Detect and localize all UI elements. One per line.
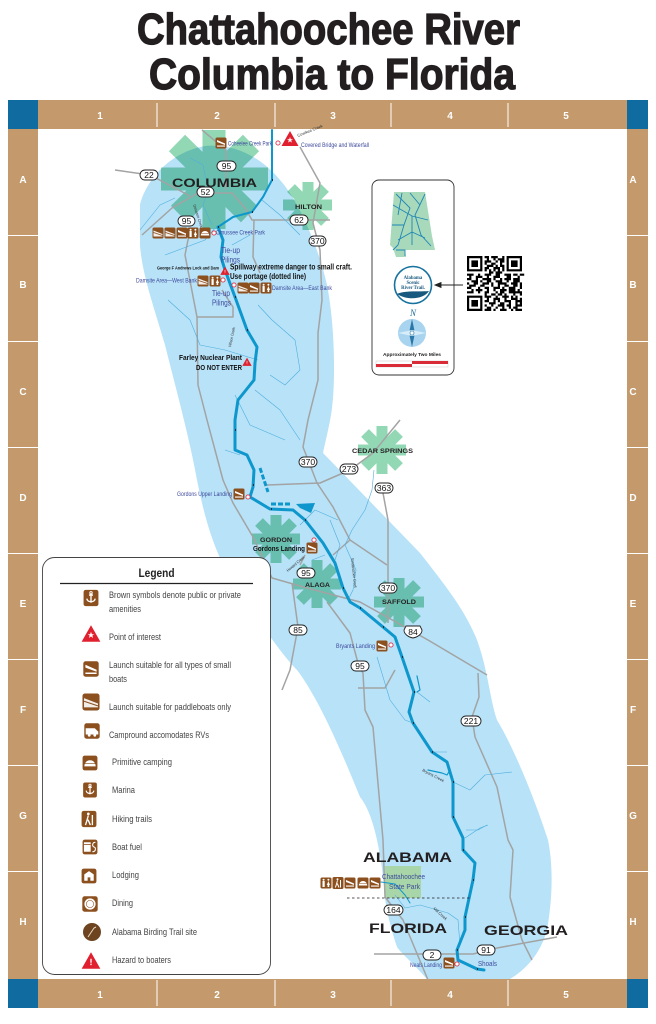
map frame: 1 — [97, 990, 103, 1001]
warning labels — [157, 262, 352, 553]
warning labels: DO NOT ENTER — [196, 363, 242, 372]
site labels: Chattahoochee — [382, 872, 425, 881]
map frame: C — [19, 387, 27, 398]
legend text: boats — [109, 674, 127, 684]
creek labels: Howard Creek — [285, 555, 305, 573]
map frame: 5 — [563, 990, 569, 1001]
map frame: 5 — [563, 111, 569, 122]
site labels: Omussee Creek Park — [216, 230, 266, 236]
legend text: Lodging — [112, 870, 139, 880]
inset panel — [372, 180, 454, 375]
site markers — [212, 141, 478, 969]
map frame: G — [629, 811, 637, 822]
title: Chattahoochee River — [137, 5, 520, 54]
state boundary — [347, 897, 470, 899]
legend text: Primitive camping — [112, 757, 172, 767]
river — [218, 130, 484, 970]
map frame: F — [630, 705, 636, 716]
highway shields: 370 — [381, 583, 395, 593]
city marker: Saffold — [374, 578, 424, 627]
site labels: Tie-up — [221, 246, 240, 255]
Alabama Scenic River Trail logo: River Trail. — [401, 286, 425, 291]
city marker: Hilton — [283, 182, 332, 230]
site labels: Covered Bridge and Waterfall — [301, 143, 369, 149]
creek labels: Sandandchee Creek — [350, 558, 358, 588]
legend text — [109, 590, 241, 965]
city and state labels: FLORIDA — [369, 920, 447, 936]
title — [137, 5, 520, 99]
legend text: Dining — [112, 898, 133, 908]
site labels: Bryants Landing — [336, 644, 375, 650]
highway shields: 95 — [301, 568, 311, 578]
highway shields: 95 — [355, 661, 365, 671]
highway shields: 164 — [386, 905, 401, 915]
legend text: Campround accomodates RVs — [109, 730, 209, 740]
highway shields: 84 — [408, 627, 418, 637]
map frame: 3 — [330, 990, 336, 1001]
creek labels: Bryans Creek — [422, 767, 445, 783]
Alabama Scenic River Trail logo: Scenic — [406, 281, 420, 286]
highway shields: 370 — [310, 236, 325, 246]
city and state labels: CEDAR SPRINGS — [352, 449, 413, 455]
city and state labels: ALAGA — [305, 583, 331, 589]
city marker: Cedar Springs — [358, 426, 406, 474]
legend text: Brown symbols denote public or private — [109, 590, 241, 600]
creek labels: Omussee Creek — [192, 204, 204, 228]
state park area — [385, 866, 421, 898]
legend text: Launch suitable for paddleboats only — [109, 702, 231, 712]
compass — [398, 308, 426, 347]
map frame: B — [629, 280, 637, 291]
site labels: Neals Landing — [410, 963, 442, 969]
city and state labels: ALABAMA — [363, 849, 452, 865]
creeks — [140, 158, 512, 945]
city marker: Gordon — [252, 515, 300, 563]
roads — [115, 130, 557, 980]
legend text: Marina — [112, 785, 135, 795]
highway shields: 273 — [342, 464, 356, 474]
highway shields: 22 — [144, 170, 154, 180]
warning labels: Spillway extreme danger to small craft. — [230, 262, 352, 272]
map frame: E — [20, 599, 27, 610]
highway shields: 85 — [293, 625, 303, 635]
site labels: Shoals — [478, 959, 497, 968]
warning labels: Use portage (dotted line) — [230, 272, 306, 281]
map frame: D — [629, 493, 637, 504]
scale bar — [376, 361, 448, 367]
highway shields: 370 — [301, 457, 315, 467]
city and state labels: SAFFOLD — [382, 600, 417, 606]
map frame: G — [19, 811, 27, 822]
title: Columbia to Florida — [149, 50, 515, 99]
creek labels: Cowikee Creek — [297, 123, 323, 138]
highway shields: 2 — [430, 950, 435, 960]
site labels: Damsite Area—West Bank — [136, 278, 198, 284]
legend panel — [42, 558, 270, 974]
legend text: Launch suitable for all types of small — [109, 660, 231, 670]
legend text: Boat fuel — [112, 842, 142, 852]
map frame: H — [629, 917, 637, 928]
map frame: E — [630, 599, 637, 610]
city marker: Columbia — [161, 130, 268, 229]
mini map of Alabama — [390, 192, 435, 257]
compass: N — [409, 308, 417, 318]
site labels: Pilings — [212, 298, 231, 308]
site labels: Damsite Area—East Bank — [272, 286, 333, 292]
highway shields: 62 — [294, 215, 304, 225]
city and state labels — [172, 176, 568, 938]
map frame: B — [19, 280, 27, 291]
creek labels: Wilson Creek — [227, 327, 236, 347]
arrow to logo — [435, 282, 463, 288]
highway shields: 91 — [481, 945, 491, 955]
city marker: Alaga — [293, 560, 341, 608]
map frame: F — [20, 705, 26, 716]
legend text: Hazard to boaters — [112, 955, 171, 965]
highway shields: 95 — [222, 161, 231, 171]
site labels: Gordons Upper Landing — [177, 492, 232, 498]
highway shields — [140, 161, 495, 960]
creek labels — [192, 123, 448, 921]
legend text: Alabama Birding Trail site — [112, 927, 197, 937]
Alabama Scenic River Trail logo: Alabama — [404, 276, 423, 281]
map frame: 1 — [97, 111, 103, 122]
map frame: A — [629, 175, 637, 186]
creek labels: Mill Creek — [432, 906, 448, 921]
city and state labels: GORDON — [260, 538, 292, 544]
city and state labels: GEORGIA — [484, 922, 568, 938]
site labels: State Park — [389, 882, 420, 891]
legend heading: Legend — [138, 566, 174, 580]
map frame: A — [19, 175, 27, 186]
legend text: Hiking trails — [112, 814, 152, 824]
Alabama Scenic River Trail logo — [394, 266, 432, 304]
map frame: C — [629, 387, 637, 398]
QR code — [467, 256, 524, 311]
highway shields: 221 — [464, 716, 478, 726]
city and state labels: HILTON — [295, 205, 322, 211]
map frame: H — [19, 917, 27, 928]
legend text: Point of interest — [109, 632, 161, 642]
site labels: Tie-up — [212, 289, 230, 298]
map frame: 4 — [447, 990, 453, 1001]
river corridor — [140, 146, 552, 979]
highway shields: 95 — [182, 216, 191, 226]
highway shields: 363 — [377, 483, 391, 493]
site labels: Coheelee Creek Park — [228, 142, 273, 148]
hazard and point of interest markers — [220, 131, 298, 366]
legend text: amenities — [109, 604, 141, 614]
site labels — [136, 142, 497, 969]
map frame: 2 — [214, 111, 220, 122]
warning labels: George F Andrews Lock and Dam — [157, 266, 219, 270]
map frame: 2 — [214, 990, 220, 1001]
amenity icons — [152, 138, 454, 968]
warning labels: Farley Nuclear Plant — [179, 353, 242, 362]
map frame: 3 — [330, 111, 336, 122]
highway shields: 52 — [201, 187, 210, 197]
map frame: D — [19, 493, 27, 504]
warning labels: Gordons Landing — [253, 544, 305, 553]
map frame: 4 — [447, 111, 453, 122]
scale label: Approximately Two Miles — [383, 352, 442, 357]
site labels: Pilings — [221, 256, 240, 264]
legend icons — [82, 590, 101, 969]
city and state labels: COLUMBIA — [172, 176, 257, 190]
